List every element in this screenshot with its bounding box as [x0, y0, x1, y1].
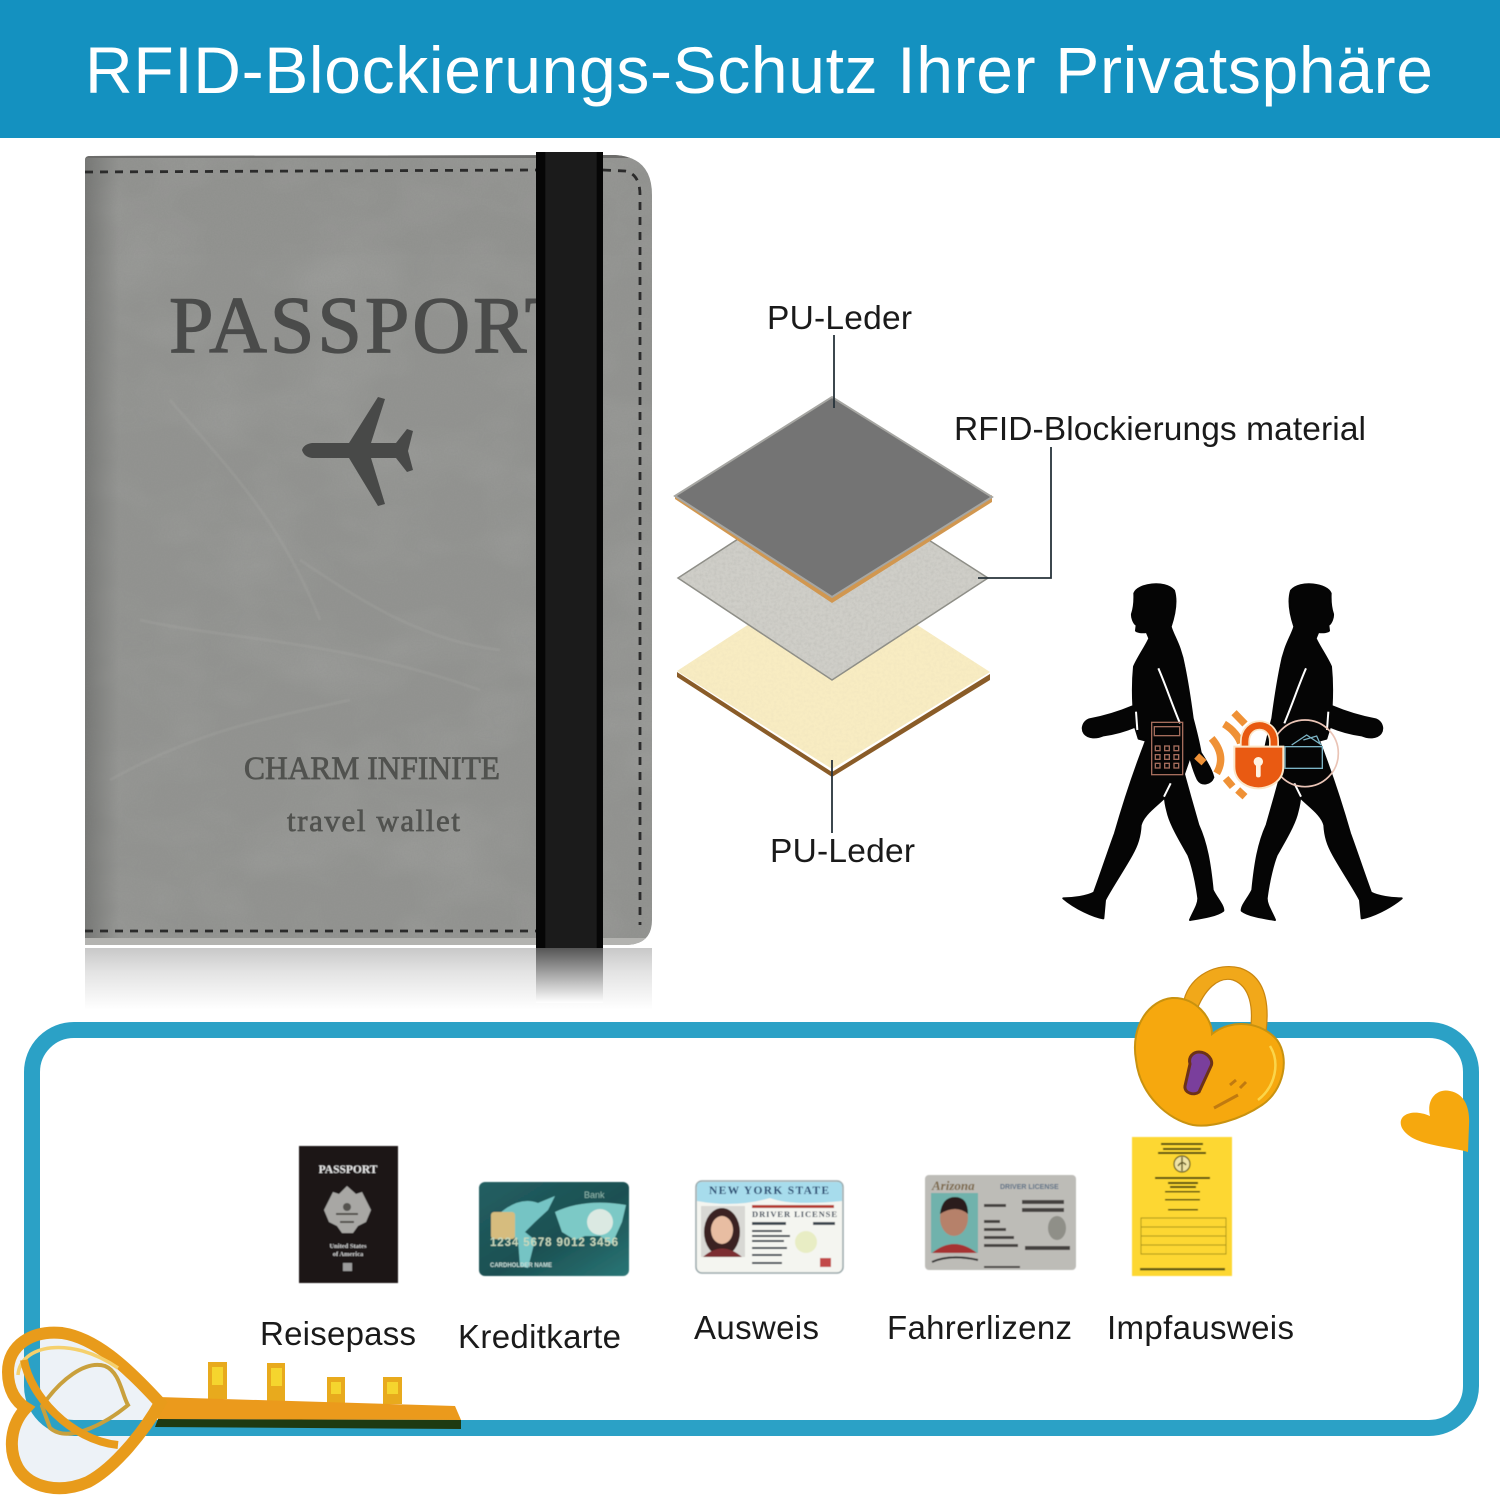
panel: documents frame	[8, 967, 1471, 1488]
icon: small orange heart	[1401, 1090, 1469, 1152]
icon: Arizona driver license: DRIVER LICENSE	[1000, 1184, 1059, 1191]
label: bottom PU-Leder: PU-Leder	[770, 833, 915, 870]
icon: golden heart key	[8, 1333, 461, 1488]
elastic band	[536, 152, 603, 948]
icon: credit card	[479, 1182, 629, 1276]
leader line: RFID material	[978, 447, 1051, 578]
icon: New York ID card: NEW YORK STATE	[709, 1185, 829, 1197]
label: Fahrerlizenz: Fahrerlizenz	[887, 1309, 1072, 1346]
icon: New York ID card: DRIVER LICENSE	[752, 1209, 837, 1219]
icon: credit card: 1234 5678 9012 3456	[490, 1237, 618, 1249]
icon: credit card: CARDHOLDER NAME	[490, 1263, 552, 1269]
label: Ausweis: Ausweis	[694, 1309, 819, 1346]
label: Kreditkarte: Kreditkarte	[458, 1318, 621, 1355]
layer: top PU leather	[675, 397, 992, 603]
icon: left walking man	[1063, 584, 1223, 920]
icon: calculator card	[1152, 722, 1183, 775]
icon: passport document: United States	[329, 1243, 367, 1250]
key teeth	[208, 1362, 402, 1404]
icon: passport document: of America	[333, 1251, 364, 1258]
label: top PU-Leder: PU-Leder	[767, 300, 912, 337]
icon: Arizona driver license: Arizona	[931, 1178, 975, 1193]
leader line: top PU leather	[833, 335, 835, 408]
icon: Arizona driver license	[925, 1175, 1076, 1270]
layer: RFID blocking material	[676, 540, 988, 681]
embossed word PASSPORT: PASSPORT	[169, 282, 577, 370]
key bow backing	[8, 1333, 160, 1488]
label: Reisepass: Reisepass	[260, 1315, 416, 1352]
layer: bottom PU leather	[677, 625, 990, 776]
panel: walking silhouettes with RFID lock	[1063, 584, 1402, 920]
icon: New York ID card	[696, 1181, 843, 1273]
panel: material layers diagram	[675, 300, 1366, 870]
label: Impfausweis: Impfausweis	[1107, 1309, 1294, 1346]
icon: yellow vaccination card	[1132, 1137, 1232, 1276]
icon: passport document: PASSPORT	[319, 1164, 378, 1176]
icon: orange padlock	[1234, 725, 1283, 788]
embossed brand name: CHARM INFINITE	[244, 751, 500, 787]
header banner	[0, 0, 1500, 138]
icon: signal waves	[1197, 713, 1245, 797]
label: RFID material: RFID-Blockierungs material	[954, 411, 1366, 448]
icon: heart padlock	[1135, 967, 1284, 1126]
leader line: bottom PU leather	[831, 760, 833, 833]
rounded blue frame	[32, 1030, 1471, 1428]
title: RFID-Blockierungs-Schutz Ihrer Privatsphäre	[85, 33, 1433, 107]
icon: airplane	[302, 397, 413, 506]
icon: right walking man	[1242, 584, 1402, 920]
icon: passport document	[299, 1146, 398, 1283]
panel: passport wallet product	[85, 152, 652, 1010]
leather cover	[85, 155, 652, 945]
icon: credit card: Bank	[584, 1190, 605, 1200]
key bow	[8, 1333, 160, 1488]
key shaft	[158, 1397, 461, 1420]
icon: scanning ring and wallet	[1272, 720, 1338, 787]
embossed subtitle: travel wallet	[287, 803, 460, 838]
passport wallet reflection	[85, 948, 652, 1010]
